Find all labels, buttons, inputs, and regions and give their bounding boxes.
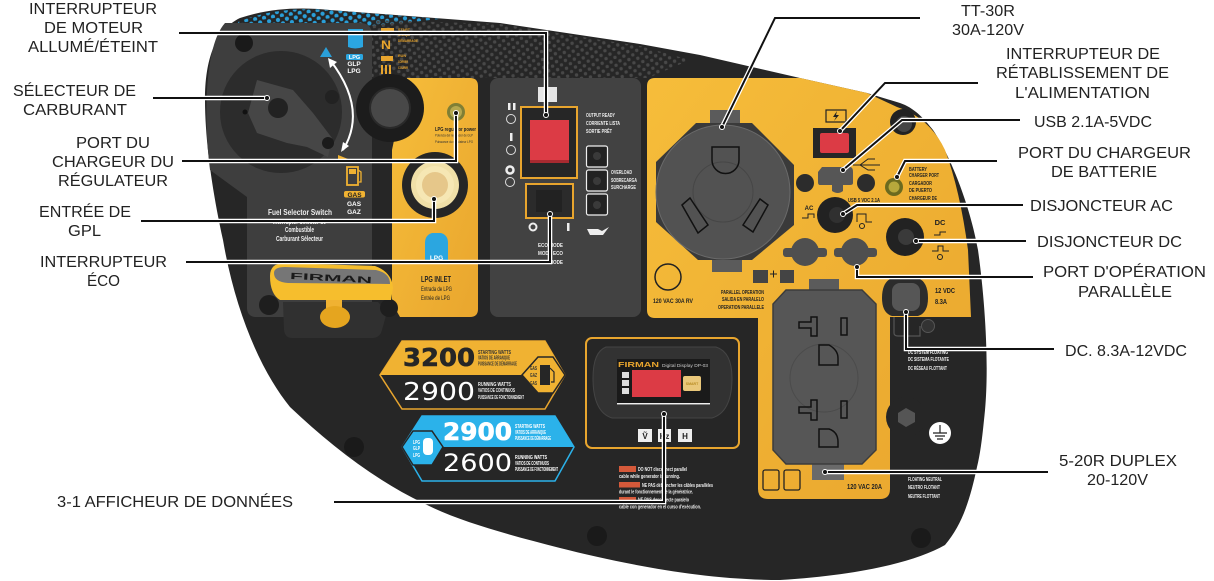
label: interrupteur de rétablissement: RÉTABLISSEMENT DE — [996, 65, 1169, 82]
wattage badge: LPG: PUISSANCE DE DÉMARRAGE — [515, 434, 551, 442]
caution text: cable while generator is running. — [619, 474, 680, 480]
label: port du chargeur de batterie: PORT DU CHARGEUR — [1018, 145, 1191, 162]
text: DC floating: DC RÉSEAU FLOTTANT — [908, 364, 948, 372]
label: port d'opération parallèle: PORT D'OPÉRATION — [1043, 264, 1206, 281]
label: disjoncteur DC: DISJONCTEUR DC — [1037, 234, 1182, 251]
leader line: TT-30R — [720, 18, 920, 130]
panel: fuel selector — [206, 23, 372, 317]
AC breaker: AC — [805, 206, 814, 212]
leader line: 5-20R duplex — [822, 470, 1048, 474]
text: parallel operation: PARALLEL OPERATION — [721, 290, 764, 296]
leader line: interrupteur de moteur — [179, 33, 548, 118]
wattage badge: LPG: LPG — [413, 440, 420, 446]
leader line: rétablissement — [838, 83, 978, 134]
leader line: port du chargeur de batterie — [894, 161, 997, 180]
caution text — [619, 466, 713, 510]
text: DC floating: DC SISTEMA FLOTANTE — [908, 357, 949, 363]
panel: engine status icons: ARRANQUE — [398, 33, 410, 37]
USB port cover: USB 5 VDC 2.1A — [848, 198, 880, 204]
text: fuel selector switch: Carburant Sélecteur — [276, 236, 323, 243]
label: sélecteur de carburant: CARBURANT — [23, 102, 128, 119]
icon: LPG tank and label: GLP — [347, 61, 361, 68]
DC breaker: DC — [935, 218, 946, 227]
leader line: DC 8.3A — [904, 310, 1054, 349]
label: port du chargeur du régulateur: RÉGULATEUR — [58, 173, 168, 190]
parallel ports — [783, 238, 877, 266]
icon: LPG tank and label: LPG — [349, 55, 360, 61]
labels: ECO MODE — [538, 243, 563, 249]
labels: SORTIE PRÊT — [586, 127, 612, 135]
text: LPG inlet: Entrada de LPG — [421, 286, 452, 293]
label: port du chargeur du régulateur: PORT DU — [76, 135, 150, 152]
text: parallel operation: SALIDA EN PARALELO — [722, 297, 764, 303]
text: fuel selector switch: Fuel Selector Switch — [268, 208, 332, 217]
indicators — [586, 146, 609, 235]
leader line: sélecteur de carburant — [153, 96, 270, 100]
caution text: NE PAS débrancher les câbles parallèles — [642, 483, 713, 489]
wattage badge: gasoline: 2900 — [403, 377, 475, 406]
fuel door handle — [259, 263, 398, 338]
data display: SMART — [686, 382, 699, 386]
panel: engine status icons — [381, 28, 419, 74]
icon: gas pump and label: GAS — [347, 201, 362, 208]
text: DC floating: NEUTRE FLOTTANT — [908, 494, 941, 500]
battery charger port: CARGADOR — [909, 181, 932, 187]
display mode keys: H — [682, 432, 688, 441]
fuel door handle: FIRMAN — [290, 271, 372, 285]
label: 5-20R duplex: 5-20R DUPLEX — [1059, 453, 1178, 470]
label: port du chargeur du régulateur: CHARGEUR DU — [52, 154, 174, 171]
icon: LPG tank and label — [346, 29, 363, 75]
labels: MODE ECO — [538, 251, 564, 257]
labels: SURCHARGE — [611, 185, 636, 191]
label: port du chargeur de batterie: DE BATTERIE — [1051, 164, 1157, 181]
icons: outlet protection — [763, 470, 800, 490]
leader line: port d'opération parallèle — [854, 264, 1033, 277]
labels: OVERLOAD — [611, 170, 632, 176]
bolt — [886, 397, 926, 437]
battery charger port: BATTERY — [909, 167, 928, 173]
data display — [586, 338, 739, 448]
wattage badge: LPG: LPG — [413, 453, 420, 459]
wattage badge: gasoline: PUISSANCE DE FONCTIONNEMENT — [478, 395, 524, 401]
label: afficheur de données: 3-1 AFFICHEUR DE DONNÉES — [57, 494, 293, 511]
text: LPG inlet — [421, 275, 452, 302]
text: parallel operation: OPERATION PARALLELE — [718, 305, 764, 311]
icon: selector arrow — [320, 47, 353, 163]
12 VDC port — [882, 278, 955, 316]
data display: Digital Display DP-03 — [662, 363, 709, 368]
label: interrupteur de moteur: DE MOTEUR — [44, 20, 143, 37]
5-20R duplex outlet — [773, 279, 876, 480]
wattage badge: gasoline: PUISSANCE DE DÉMARRAGE — [478, 360, 517, 368]
battery charger port: DE PUERTO — [909, 188, 932, 194]
icon: LPG cylinder: LPG — [430, 255, 443, 262]
icon: ground — [929, 422, 951, 444]
wattage badge: gasoline: 3200 — [403, 343, 475, 372]
leader line: interrupteur éco — [186, 212, 552, 262]
data display: FIRMAN — [618, 360, 659, 369]
text: LPG inlet: LPG INLET — [421, 275, 451, 284]
grey dotted texture — [372, 20, 690, 78]
recoil/choke knob — [356, 74, 424, 142]
text: fuel selector switch: Combustible — [285, 227, 314, 234]
panel: engine status icons: START — [398, 28, 411, 32]
AC breaker — [802, 197, 872, 233]
labels: OUTPUT READY — [586, 113, 615, 119]
wattage badge: LPG: GLP — [413, 446, 420, 452]
dark panel right side details — [886, 317, 951, 500]
reset switch — [813, 110, 856, 158]
12 VDC port: 12 VDC — [935, 286, 955, 295]
fuel selector dial — [220, 51, 342, 173]
text: regulator power: Puissance du régulateur LPG — [435, 140, 473, 144]
blue dotted texture — [212, 9, 440, 56]
caution text: NE PAS desconecte paralelo — [638, 498, 689, 504]
wattage badge: gasoline — [380, 341, 565, 409]
label: interrupteur de rétablissement: INTERRUPTEUR DE — [1006, 46, 1160, 63]
regulator port — [447, 103, 465, 121]
status icons — [506, 103, 516, 186]
leader line: disjoncteur AC — [840, 205, 1023, 216]
caution text: durant le fonctionnement de la génératrice. — [619, 490, 693, 496]
LPG inlet fitting — [402, 152, 468, 218]
TT-30R outlet cover — [656, 110, 794, 272]
USB port cover — [796, 159, 880, 204]
wattage badge: LPG: STARTING WATTS — [515, 424, 545, 430]
text: regulator power: LPG regulator power — [435, 127, 476, 133]
labels: CORRIENTE LISTA — [586, 121, 620, 127]
label: DC 8.3A: DC. 8.3A-12VDC — [1065, 343, 1187, 360]
wattage badge: LPG — [402, 416, 574, 481]
wattage badge: gasoline: VATIOS DE CONTINUOS — [478, 388, 515, 394]
text: DC floating: FLOATING NEUTRAL — [908, 477, 943, 483]
battery charger port: CHARGER PORT — [909, 173, 939, 179]
leader line: disjoncteur DC — [914, 238, 1026, 244]
wattage badge: LPG: VATIOS DE ARRANQUE — [515, 430, 546, 436]
label: sélecteur de carburant: SÉLECTEUR DE — [13, 83, 136, 100]
wattage badge: LPG: RUNNING WATTS — [515, 455, 547, 461]
label: interrupteur éco: INTERRUPTEUR — [40, 254, 167, 271]
12 VDC port: 8.3A — [935, 297, 947, 306]
panel: engine status icons: RUN — [398, 54, 406, 58]
text: fuel selector switch — [268, 208, 332, 243]
wattage badge: gasoline: GAZ — [530, 373, 537, 379]
leader line: entrée de GPL — [141, 196, 436, 221]
wattage badge: LPG: VATIOS DE CONTINUOS — [515, 461, 549, 467]
label: entrée de GPL: GPL — [68, 223, 101, 240]
icon: TT-30 receptacle: 120 VAC 30A RV — [653, 298, 694, 305]
label: entrée de GPL: ENTRÉE DE — [39, 204, 131, 221]
text: parallel operation — [718, 270, 794, 311]
icon: gas pump and label: GAZ — [347, 209, 361, 216]
display mode keys — [638, 429, 692, 442]
text: DC floating — [908, 350, 949, 500]
engine icon — [538, 87, 557, 102]
icon: LPG tank and label: LPG — [347, 68, 361, 75]
icon: LPG cylinder — [425, 233, 448, 263]
label: 5-20R duplex: 20-120V — [1087, 472, 1149, 489]
label: USB: USB 2.1A-5VDC — [1034, 114, 1152, 131]
label: port d'opération parallèle: PARALLÈLE — [1078, 284, 1172, 301]
panel: AC outlets — [647, 78, 971, 499]
label: interrupteur de rétablissement: L'ALIMENTATION — [1015, 85, 1150, 102]
label: interrupteur de moteur: ALLUMÉ/ÉTEINT — [28, 39, 159, 56]
panel: engine status icons: DÉMARRAGE — [398, 38, 419, 43]
text: regulator power — [435, 127, 476, 144]
label: interrupteur éco: ÉCO — [87, 273, 120, 290]
leader line: afficheur de données — [334, 412, 666, 502]
wattage badge: gasoline: VATIOS DE ARRANQUE — [478, 356, 510, 362]
icon: gas pump and label: GAS — [347, 192, 362, 199]
labels: ECO MODE — [538, 260, 563, 266]
display mode keys: Hz — [660, 432, 669, 441]
caution text: cable con generador en el curso d'exécution. — [619, 504, 701, 510]
panel: LPG inlet — [392, 78, 478, 317]
battery charger port — [885, 167, 939, 202]
text: DC floating: NEUTRO FLOTANT — [908, 485, 941, 491]
engine switch — [521, 107, 577, 178]
caution text: DO NOT disconnect parallel — [638, 467, 687, 473]
wattage badge: LPG: 2600 — [443, 449, 512, 477]
generator control panel body — [205, 9, 987, 580]
DC breaker — [886, 218, 949, 260]
label: disjoncteur AC: DISJONCTEUR AC — [1030, 198, 1173, 215]
labels: SOBRECARGA — [611, 178, 637, 184]
icon: TT-30 receptacle — [653, 264, 694, 305]
display mode keys: Ṽ — [642, 432, 648, 441]
wattage badge: gasoline: GAS — [530, 381, 537, 387]
label: TT-30R: 30A-120V — [952, 22, 1025, 39]
leader line: USB — [840, 120, 1020, 172]
wattage badge: LPG: 2900 — [443, 418, 512, 446]
battery charger port: CHARGEUR DE — [909, 196, 937, 202]
panel: engine status icons: N — [381, 38, 391, 52]
text: regulator power: Potencia del regulador de GLP — [435, 134, 474, 138]
text: 120 VAC 20A: 120 VAC 20A — [847, 482, 882, 491]
eco switch — [526, 184, 573, 231]
wattage badge: gasoline: GAS — [530, 366, 537, 372]
wattage badge: gasoline: STARTING WATTS — [478, 350, 511, 356]
icon: gas pump and label — [344, 167, 365, 216]
panel: engine status icons: COURIR — [398, 66, 408, 70]
label: TT-30R: TT-30R — [961, 3, 1015, 20]
labels — [538, 113, 637, 266]
label: interrupteur de moteur: INTERRUPTEUR — [29, 1, 157, 18]
wattage badge: gasoline: RUNNING WATTS — [478, 382, 512, 388]
panel: engine status icons: CORRER — [398, 60, 408, 64]
text: fuel selector switch: Interruptor Selector de — [273, 219, 326, 226]
text: LPG inlet: Entrée de LPG — [421, 295, 450, 302]
screws — [235, 34, 931, 548]
wattage badge: LPG: PUISSANCE DE FONCTIONNEMENT — [515, 467, 558, 473]
text: DC floating: DC SYSTEM FLOATING — [908, 350, 948, 356]
leader line: port du chargeur du régulateur — [182, 110, 458, 161]
panel: controls — [490, 78, 641, 317]
